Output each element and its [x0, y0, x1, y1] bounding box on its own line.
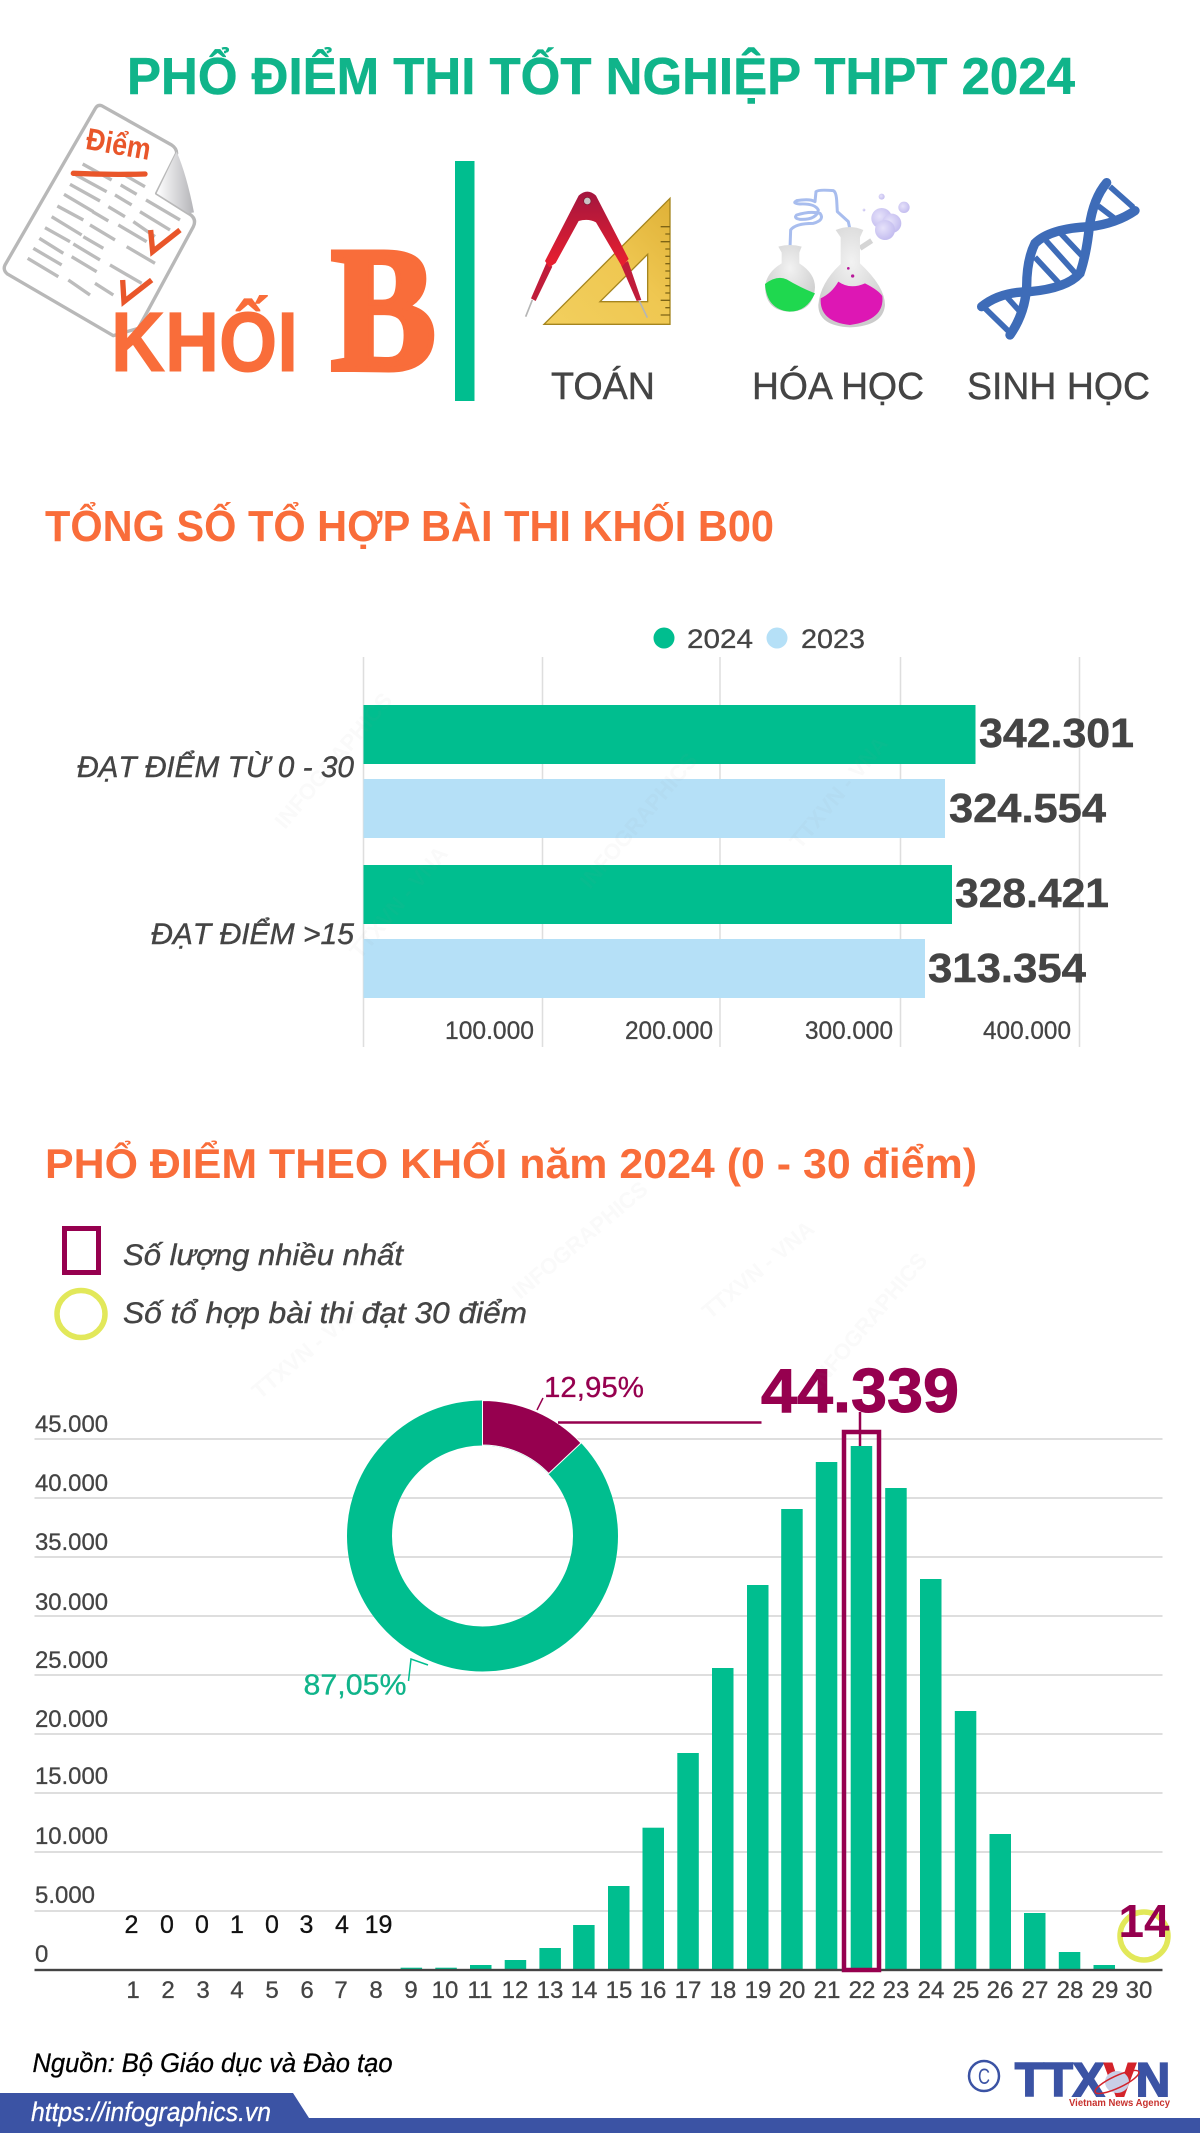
footer bar [0, 2093, 1200, 2133]
logo: TTXVN: TTXVN [1015, 2053, 1170, 2106]
column chart: score distribution: 15 [606, 1977, 632, 2004]
column chart: score distribution: 40.000 [35, 1470, 108, 1497]
column chart: score distribution: 19 [365, 1911, 392, 1939]
subject labels: SINH HỌC [967, 366, 1150, 408]
donut chart: share [304, 1372, 762, 1702]
column chart: score distribution: 30 [1126, 1977, 1152, 2004]
divider bar [455, 161, 474, 401]
column chart: score distribution: 6 [300, 1977, 314, 2004]
column chart: score distribution: 0 [195, 1911, 209, 1939]
bar chart: total B00: 313.354 [928, 945, 1086, 991]
column chart: score distribution: 16 [640, 1977, 666, 2004]
column chart: score distribution [34, 1411, 1162, 2004]
column chart: score distribution: 20.000 [35, 1706, 108, 1733]
column chart: score distribution: 27 [1022, 1977, 1048, 2004]
column chart: score distribution: 10.000 [35, 1823, 108, 1850]
column chart: score distribution: 8 [369, 1977, 383, 2004]
heading: khoi B: B [331, 210, 436, 408]
bar chart: total B00: ĐẠT ĐIỂM >15 [151, 917, 354, 951]
column chart: score distribution: 18 [710, 1977, 736, 2004]
column chart: score distribution: 5 [265, 1977, 279, 2004]
title: PHỔ ĐIỂM THI TỐT NGHIỆP THPT 2024 [127, 47, 1075, 106]
donut chart: share: 12,95% [544, 1372, 644, 1404]
column chart: score distribution: 19 [745, 1977, 771, 2004]
bar chart: total B00: 300.000 [805, 1017, 893, 1045]
column chart: score distribution: 1 [230, 1911, 244, 1939]
column chart: score distribution: 0 [160, 1911, 174, 1939]
logo: TTXVN: C [978, 2064, 990, 2089]
column chart: score distribution: 29 [1092, 1977, 1118, 2004]
bar chart: total B00: 328.421 [955, 870, 1109, 916]
icon: DNA helix [982, 183, 1135, 335]
footer bar: https://infographics.vn [31, 2097, 271, 2127]
watermarks: TTXVN - VNA [785, 731, 893, 853]
column chart: score distribution: 0 [265, 1911, 279, 1939]
callout: peak value 44.339 [761, 1357, 959, 1970]
legend: most common: Số lượng nhiều nhất [123, 1239, 405, 1272]
watermarks: TTXVN - VNA [697, 1216, 819, 1324]
column chart: score distribution: 13 [537, 1977, 563, 2004]
heading: khoi B [111, 210, 436, 408]
subject labels: TOÁN [551, 365, 655, 408]
legend: most common [64, 1228, 405, 1272]
heading: score distribution: PHỔ ĐIỂM THEO KHỐI năm 2024 (0 - 30 điểm) [45, 1138, 977, 1187]
column chart: score distribution: 20 [779, 1977, 805, 2004]
watermarks [247, 688, 932, 1404]
column chart: score distribution: 0 [35, 1941, 48, 1968]
column chart: score distribution: 10 [432, 1977, 458, 2004]
column chart: score distribution: 14 [571, 1977, 597, 2004]
icon: compass and set square [526, 192, 670, 324]
column chart: score distribution: 1 [126, 1977, 140, 2004]
callout: 14 perfect scores: 14 [1118, 1895, 1170, 1947]
bar chart: total B00 [77, 657, 1134, 1047]
watermarks: TTXVN - VNA [345, 841, 453, 963]
icon: chemistry flasks [765, 190, 910, 327]
column chart: score distribution: 25 [953, 1977, 979, 2004]
column chart: score distribution: 12 [502, 1977, 528, 2004]
source: Nguồn: Bộ Giáo dục và Đào tạo [32, 2048, 392, 2078]
column chart: score distribution: 26 [987, 1977, 1013, 2004]
legend: years [654, 624, 865, 654]
legend: perfect scores [57, 1290, 527, 1338]
watermarks: INFOGRAPHICS [575, 748, 702, 893]
watermarks: TTXVN - VNA [247, 1296, 369, 1404]
watermarks: INFOGRAPHICS [507, 1176, 652, 1304]
icon: exam paper with score [4, 105, 195, 336]
callout: peak value 44.339: 44.339 [761, 1357, 959, 1426]
column chart: score distribution: 2 [161, 1977, 175, 2004]
column chart: score distribution: 24 [918, 1977, 944, 2004]
subject labels [551, 365, 1150, 408]
column chart: score distribution: 15.000 [35, 1763, 108, 1790]
column chart: score distribution: 25.000 [35, 1647, 108, 1674]
column chart: score distribution: 28 [1057, 1977, 1083, 2004]
legend: years: 2023 [801, 624, 865, 654]
bar chart: total B00: 200.000 [625, 1017, 713, 1045]
icon: exam paper with score: Điểm [84, 122, 153, 167]
column chart: score distribution: 30.000 [35, 1589, 108, 1616]
column chart: score distribution: 2 [125, 1911, 138, 1939]
subject labels: HÓA HỌC [752, 365, 924, 408]
column chart: score distribution: 9 [404, 1977, 418, 2004]
bar chart: total B00: 342.301 [979, 710, 1134, 756]
legend: perfect scores: Số tổ hợp bài thi đạt 30 điểm [123, 1297, 527, 1330]
bar chart: total B00: 100.000 [445, 1017, 534, 1045]
column chart: score distribution: 22 [849, 1977, 875, 2004]
column chart: score distribution: 4 [335, 1911, 349, 1939]
logo: TTXVN: Vietnam News Agency [1069, 2097, 1170, 2109]
column chart: score distribution: 35.000 [35, 1529, 108, 1556]
heading: total B00: TỔNG SỐ TỔ HỢP BÀI THI KHỐI B00 [45, 500, 774, 551]
bar chart: total B00: 324.554 [949, 785, 1106, 831]
column chart: score distribution: 3 [300, 1911, 313, 1939]
column chart: score distribution: 45.000 [35, 1411, 108, 1438]
legend: years: 2024 [687, 624, 753, 654]
column chart: score distribution: 3 [196, 1977, 210, 2004]
watermarks: INFOGRAPHICS [805, 1248, 932, 1393]
column chart: score distribution: 23 [883, 1977, 909, 2004]
column chart: score distribution: 17 [675, 1977, 701, 2004]
watermarks: INFOGRAPHICS [270, 688, 397, 833]
column chart: score distribution: 21 [814, 1977, 840, 2004]
column chart: score distribution: 11 [468, 1977, 492, 2004]
bar chart: total B00: ĐẠT ĐIỂM TỪ 0 - 30 [77, 750, 354, 784]
column chart: score distribution: 7 [334, 1977, 348, 2004]
heading: khoi B: KHỐI [111, 295, 298, 389]
column chart: score distribution: 5.000 [35, 1882, 95, 1909]
column chart: score distribution: 4 [230, 1977, 244, 2004]
donut chart: share: 87,05% [304, 1670, 406, 1702]
bar chart: total B00: 400.000 [983, 1017, 1071, 1045]
